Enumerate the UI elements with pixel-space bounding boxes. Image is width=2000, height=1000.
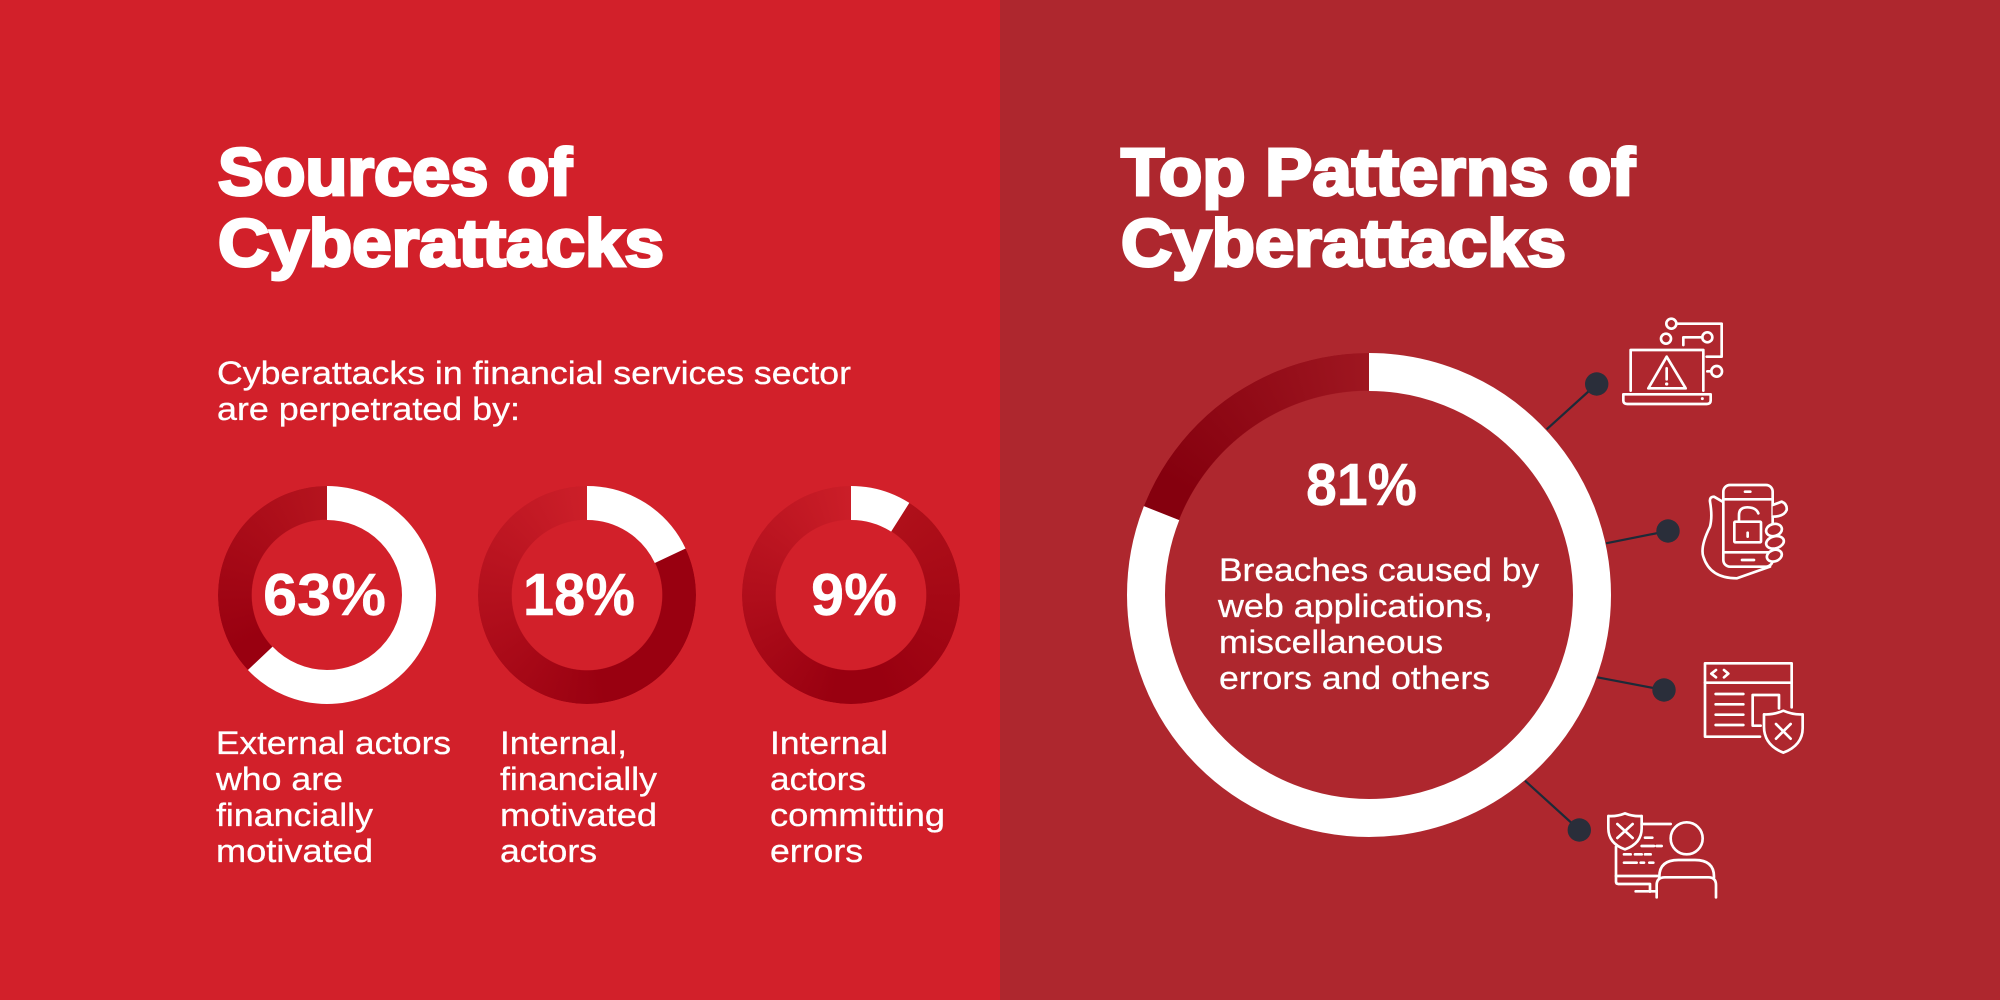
- heading: sources of cyberattacks: [218, 135, 664, 281]
- heading: top patterns of cyberattacks: Top Patterns of: [1121, 135, 1636, 210]
- donut chart: 81%: [1127, 353, 1611, 837]
- caption: external actors: [215, 725, 451, 869]
- caption: internal financially motivated: actors: [500, 833, 597, 869]
- icon: person at computer with shield: [1608, 813, 1716, 897]
- icon: laptop warning with circuit: [1623, 319, 1722, 404]
- caption: external actors: External actors: [216, 725, 451, 761]
- description text: Breaches caused by: [1219, 552, 1539, 588]
- donut chart: 9%: [742, 486, 960, 704]
- icon: browser window with shield: [1705, 663, 1803, 753]
- intro text: are perpetrated by:: [217, 391, 520, 427]
- description text: web applications,: [1217, 588, 1493, 624]
- caption: internal actors committing errors: [770, 725, 945, 869]
- caption: internal actors committing errors: Internal: [770, 725, 888, 761]
- heading: top patterns of cyberattacks: Cyberattacks: [1121, 206, 1566, 281]
- description text: [1217, 552, 1539, 696]
- heading: sources of cyberattacks: Cyberattacks: [218, 206, 664, 281]
- panel: top patterns of cyberattacks: [1000, 0, 2000, 1000]
- description text: miscellaneous: [1219, 624, 1443, 660]
- donut chart: 81%: 81%: [1306, 452, 1417, 518]
- caption: internal actors committing errors: errors: [770, 833, 863, 869]
- caption: external actors: who are: [215, 761, 343, 797]
- panel: sources of cyberattacks: [216, 145, 960, 862]
- caption: internal actors committing errors: actors: [770, 761, 866, 797]
- caption: internal actors committing errors: committing: [770, 797, 945, 833]
- donut chart: 18%: [478, 486, 696, 704]
- caption: external actors: motivated: [216, 833, 373, 869]
- icon: hand holding unlocked phone: [1702, 485, 1787, 578]
- connector lines: [1525, 384, 1668, 830]
- heading: sources of cyberattacks: Sources of: [218, 135, 573, 210]
- donut chart: 18%: 18%: [523, 562, 635, 628]
- intro text: [217, 355, 851, 427]
- intro text: Cyberattacks in financial services sector: [217, 355, 851, 391]
- heading: top patterns of cyberattacks: [1121, 135, 1636, 281]
- donut chart: 9%: 9%: [811, 562, 897, 628]
- caption: internal financially motivated: motivated: [500, 797, 657, 833]
- caption: internal financially motivated: [500, 725, 657, 869]
- marker dots: [1568, 372, 1680, 842]
- caption: internal financially motivated: financially: [500, 761, 657, 797]
- caption: external actors: financially: [216, 797, 373, 833]
- donut chart: 63%: [218, 486, 436, 704]
- donut chart: 63%: 63%: [263, 562, 386, 628]
- description text: errors and others: [1219, 660, 1490, 696]
- caption: internal financially motivated: Internal,: [500, 725, 627, 761]
